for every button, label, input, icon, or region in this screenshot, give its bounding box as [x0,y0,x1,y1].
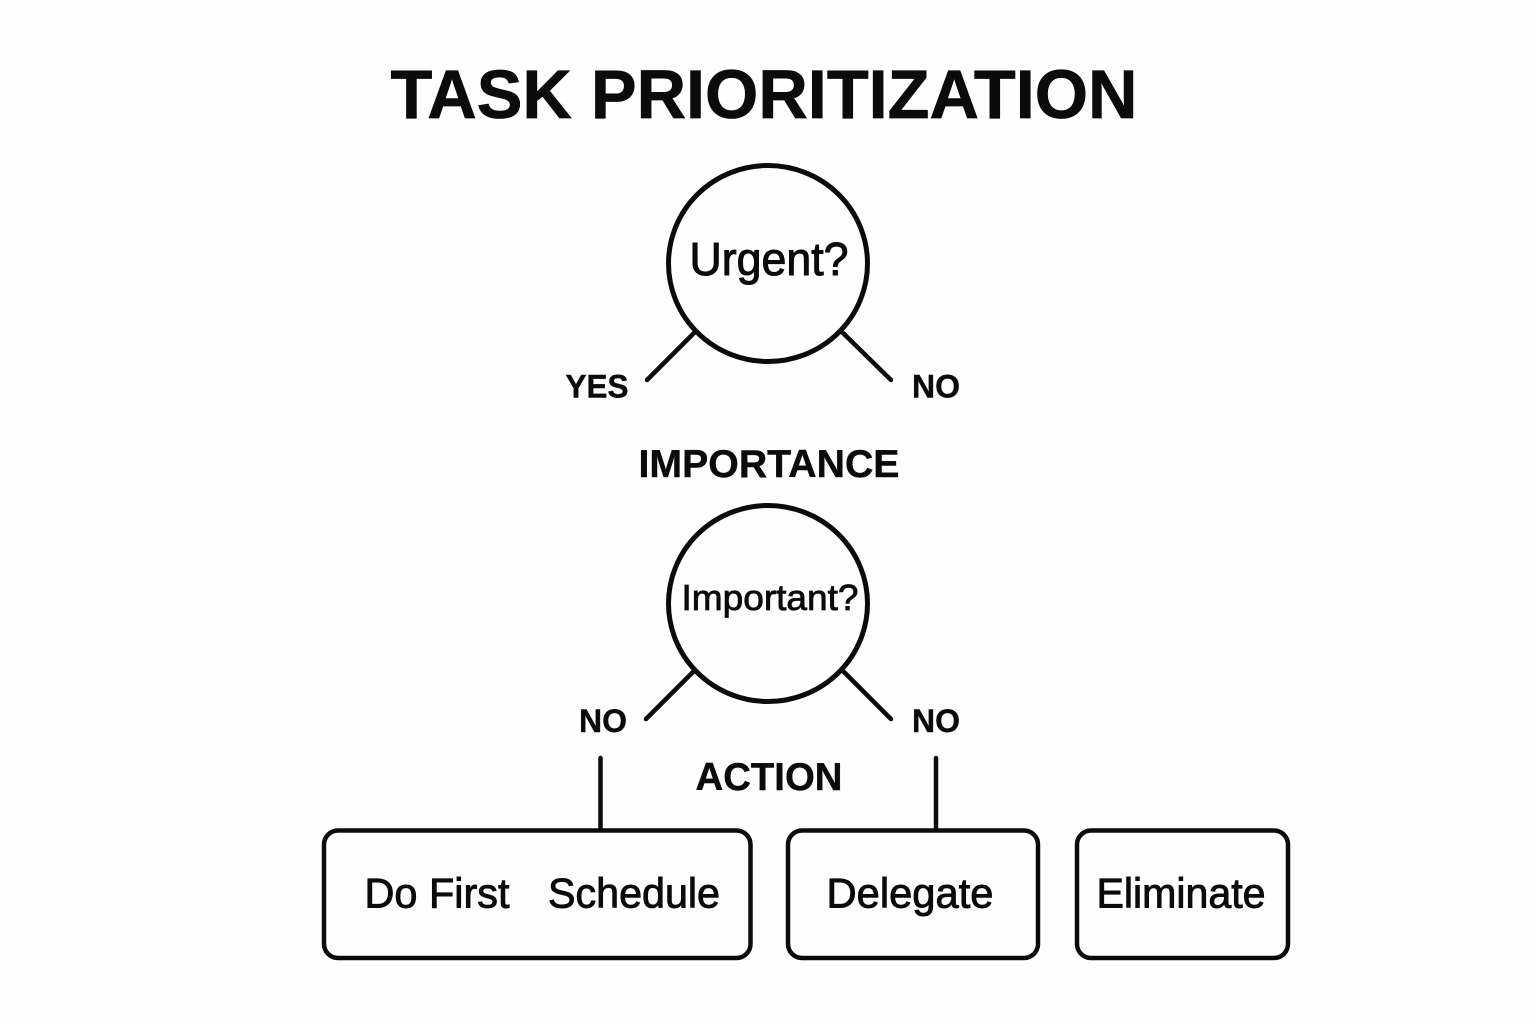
decision: important [668,506,868,702]
connector: left [598,758,603,830]
label: no: NO [912,368,960,404]
label: yes: YES [566,368,628,404]
heading: importance: IMPORTANCE [638,443,900,486]
box: delegate [788,830,1038,958]
box: eliminate: Eliminate [1096,870,1266,916]
box: do first and schedule [324,830,750,958]
box: eliminate [1077,830,1288,958]
branch line: urgent yes [647,332,695,380]
branch line: urgent no [842,332,891,380]
heading: action: ACTION [696,756,842,799]
decision: urgent: Urgent? [690,233,848,285]
decision: important: Important? [682,577,858,618]
branch line: important left [646,671,694,719]
decision: urgent [668,166,868,362]
connector: right [934,758,938,830]
label: no left: NO [579,703,627,739]
branch line: important right [843,671,891,719]
label: no right: NO [912,703,960,739]
title: TASK PRIORITIZATION [390,56,1138,133]
box: do first and schedule: Do First [364,870,510,916]
box: do first and schedule: Schedule [548,870,720,916]
box: delegate: Delegate [826,870,994,916]
